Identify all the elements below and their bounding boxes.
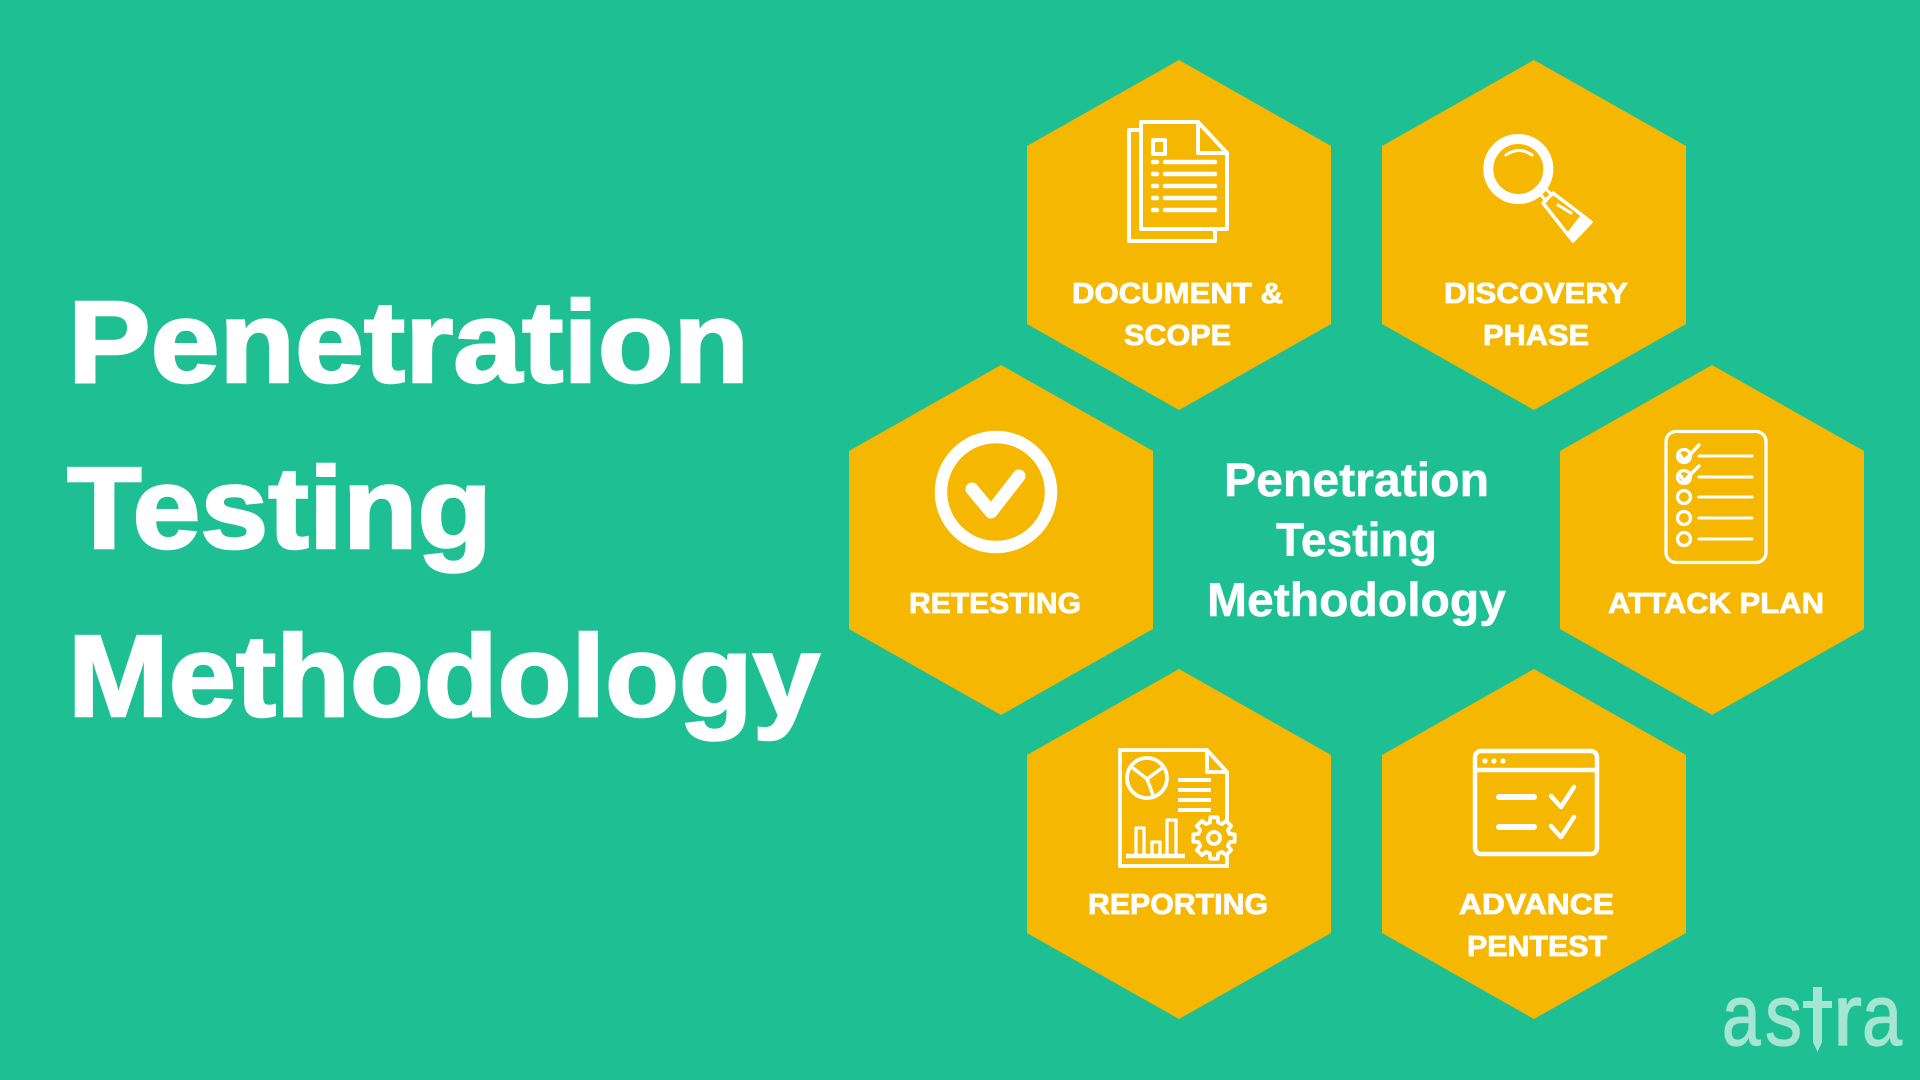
logo: astra: a <box>1862 967 1903 1064</box>
panel: reporting <box>1027 669 1331 1019</box>
label: discovery phase <box>1444 278 1628 352</box>
label: discovery phase: PHASE <box>1483 320 1589 352</box>
icon: report with gear <box>1120 750 1235 866</box>
panel: retesting <box>849 365 1153 715</box>
label: attack plan: ATTACK PLAN <box>1608 588 1824 620</box>
panel: attack plan <box>1560 365 1864 715</box>
logo: astra <box>1724 987 1902 1052</box>
title <box>67 277 820 741</box>
logo: astra: a <box>1722 967 1761 1064</box>
panel: advance pentest <box>1382 669 1686 1019</box>
icon: browser window checklist <box>1475 751 1597 854</box>
icon: check circle <box>941 437 1051 547</box>
icon: checklist <box>1666 432 1766 562</box>
title: Penetration <box>68 277 749 407</box>
center heading <box>1207 453 1506 626</box>
label: retesting: RETESTING <box>909 588 1081 620</box>
title: Testing <box>67 443 492 573</box>
title: Methodology <box>68 611 820 741</box>
label: reporting: REPORTING <box>1088 889 1268 921</box>
icon: document <box>1129 122 1227 241</box>
label: document & scope: DOCUMENT & <box>1072 278 1283 310</box>
center heading: Penetration <box>1224 453 1489 506</box>
label: advance pentest <box>1459 889 1614 963</box>
center heading: Methodology <box>1207 573 1506 626</box>
logo: astra: s <box>1765 967 1802 1064</box>
label: advance pentest: PENTEST <box>1467 931 1607 963</box>
logo: astra: r <box>1833 967 1862 1064</box>
icon: magnifying glass <box>1488 139 1591 241</box>
panel: document & scope <box>1027 60 1331 410</box>
label: advance pentest: ADVANCE <box>1459 889 1614 921</box>
label: discovery phase: DISCOVERY <box>1444 278 1628 310</box>
panel: discovery phase <box>1382 60 1686 410</box>
label: document & scope: SCOPE <box>1124 320 1231 352</box>
logo: astra: t <box>1800 967 1834 1064</box>
center heading: Testing <box>1276 513 1437 566</box>
label: document & scope <box>1072 278 1283 352</box>
